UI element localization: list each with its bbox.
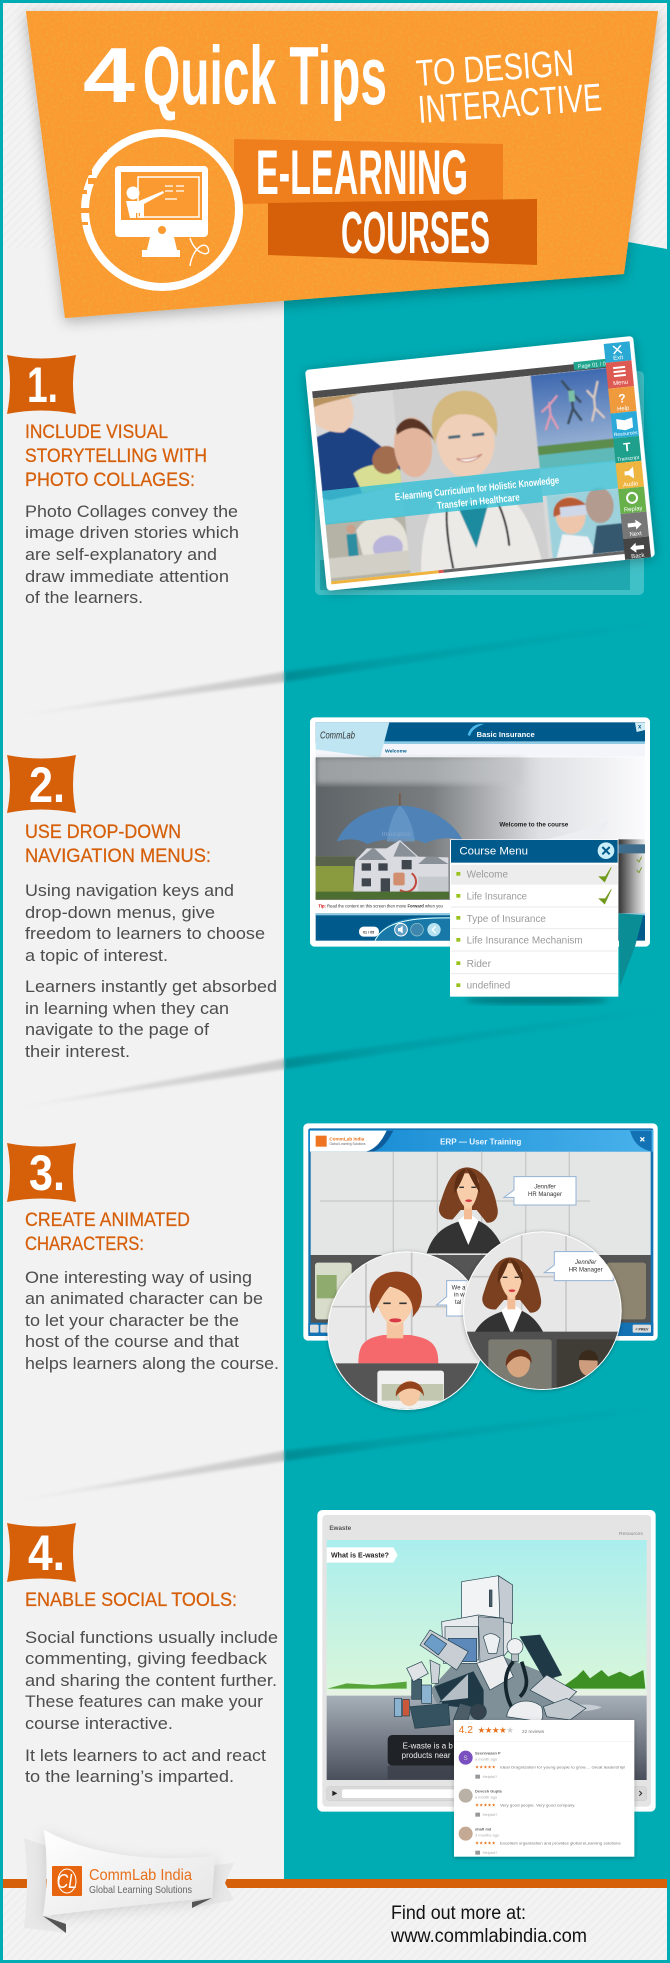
progress strip: [331, 570, 439, 584]
heading 1: STORYTELLING WITH: [25, 445, 207, 467]
screenshot: photo collage course: [305, 336, 655, 595]
section 1: [7, 355, 239, 607]
body text 2: navigate to the page of: [25, 1021, 209, 1039]
body text 3: helps learners along the course.: [25, 1355, 279, 1373]
orange footer bar: [3, 1879, 667, 1888]
logo mark: CL: [57, 1871, 77, 1893]
course window: x: [638, 725, 642, 731]
side toolbar: Transcript: [617, 455, 640, 463]
photo collage: [313, 368, 627, 588]
screenshot: e-waste course with reviews: [317, 1510, 656, 1857]
banner title: Transfer in Healthcare: [437, 492, 520, 512]
body text 1: of the learners.: [25, 589, 143, 607]
side toolbar: Menu: [613, 380, 628, 387]
course menu popup: Rider: [467, 959, 492, 970]
body text 2: a topic of interest.: [25, 947, 168, 965]
side toolbar: Help: [617, 406, 630, 413]
heading 2: USE DROP-DOWN: [25, 821, 181, 843]
side toolbar: Audio: [623, 481, 639, 489]
review three: [459, 1827, 621, 1855]
review two: a month ago: [475, 1795, 498, 1800]
caption box: [388, 1735, 468, 1779]
number badge 3: [7, 1143, 76, 1202]
review two: Helpful?: [483, 1812, 498, 1817]
body text 2: [25, 882, 277, 1061]
banner title: E-learning Curriculum for Holistic Knowledge: [395, 475, 560, 503]
find out more text: [390, 1903, 587, 1947]
storm scene with umbrella and house: [316, 757, 645, 900]
side toolbar: [604, 341, 651, 561]
course window: [317, 1510, 656, 1812]
heading 3: [25, 1209, 190, 1255]
number badge 4: [7, 1523, 76, 1582]
ribbon with logo: [24, 1830, 234, 1933]
body text 4: and sharing the content further.: [25, 1672, 277, 1690]
tilted course card: [305, 336, 655, 592]
course window: Welcome: [385, 748, 407, 754]
review two: ★★★★★: [475, 1803, 497, 1808]
footer background: [3, 1888, 667, 1960]
body text 2: drop-down menus, give: [25, 904, 215, 922]
storm scene with umbrella and house: Insurance: [382, 831, 411, 838]
teal right column: [284, 242, 667, 1907]
side toolbar: Back: [631, 553, 645, 560]
zoom circle: host character: in w: [454, 1293, 465, 1299]
logo tagline: Global Learning Solutions: [89, 1884, 192, 1896]
reviews card: 4.2: [459, 1725, 473, 1736]
scene sky and ground: [327, 1540, 647, 1780]
body text 3: to let your character be the: [25, 1312, 239, 1330]
heading 1: INCLUDE VISUAL: [25, 421, 168, 443]
review two: Very good people. Very good company.: [500, 1803, 575, 1808]
review one: Ideal Oragnization for young people to grow.... Great leadership!: [500, 1765, 625, 1770]
course menu popup: [450, 839, 618, 997]
review one: Helpful?: [483, 1774, 498, 1779]
course window: [303, 1123, 658, 1341]
reviews card: ★★★★★: [478, 1725, 513, 1735]
number badge 4: 4.: [28, 1525, 65, 1581]
body text 2: their interest.: [25, 1043, 130, 1061]
number badge 2: [7, 755, 76, 813]
character: Jennifer in window: [427, 1167, 505, 1253]
header banner: [26, 11, 658, 318]
review three: Helpful?: [483, 1850, 498, 1855]
zoom circle: Jennifer close-up: [460, 1230, 627, 1392]
course menu popup: Life Insurance: [467, 892, 527, 903]
title: 4 Quick Tips: [83, 29, 387, 122]
body text 3: host of the course and that: [25, 1333, 239, 1351]
caption box: products near: [402, 1751, 451, 1760]
side toolbar: Exit: [613, 355, 624, 362]
menu drop shadow: [465, 995, 608, 1005]
tilted course card: Page 01 / 05: [578, 361, 609, 370]
title tag: [327, 1547, 398, 1563]
body text 4: It lets learners to act and react: [25, 1747, 266, 1765]
review one: S: [464, 1756, 468, 1762]
heading 3: CREATE ANIMATED: [25, 1209, 190, 1231]
course window: [310, 717, 650, 947]
reviews card: 22 reviews: [522, 1729, 545, 1734]
body text 2: in learning when they can: [25, 1000, 229, 1018]
side toolbar: Resources: [614, 430, 638, 438]
courses ribbon: COURSES: [341, 200, 490, 266]
side toolbar: ?: [618, 391, 626, 406]
title tag: What is E-waste?: [331, 1553, 389, 1560]
zoom circle: Jennifer close-up: HR Manager: [569, 1267, 603, 1273]
body text 1: Photo Collages convey the: [25, 503, 238, 521]
speech bubble: Jennifer: HR Manager: [528, 1192, 562, 1198]
player controls: [327, 1787, 647, 1801]
player bar: 01 / 05: [363, 930, 374, 934]
body text 2: freedom to learners to choose: [25, 925, 265, 943]
heading 1: [25, 421, 207, 491]
banner shape: [26, 11, 658, 318]
body text 1: are self-explanatory and: [25, 546, 217, 564]
second menu and page fold: [618, 839, 645, 987]
speech bubble: Jennifer: [504, 1177, 576, 1205]
side toolbar: Next: [629, 531, 642, 538]
subtitle: to design interactive: [415, 42, 603, 132]
course window: ERP — User Training: [440, 1138, 521, 1147]
heading 2: [25, 821, 211, 867]
body text 4: Social functions usually include: [25, 1629, 278, 1647]
review three: shafi md: [475, 1827, 492, 1832]
course window: Global Learning Solutions: [329, 1142, 366, 1146]
course window: Resources: [619, 1531, 643, 1537]
side toolbar: Replay: [624, 506, 643, 514]
body text 4: [25, 1629, 278, 1786]
subtitle: to design interactive: INTERACTIVE: [417, 76, 603, 132]
review one: a month ago: [475, 1757, 498, 1762]
zoom circle: host character: [323, 1250, 490, 1417]
number badge 1: 1.: [27, 357, 58, 413]
section 2: [7, 755, 277, 1061]
number badge 2: 2.: [29, 757, 65, 813]
storm scene with umbrella and house: Welcome to the course: [499, 822, 569, 829]
body text 4: commenting, giving feedback: [25, 1650, 268, 1668]
heading 1: PHOTO COLLAGES:: [25, 469, 195, 491]
course window: CommLab: [320, 730, 355, 741]
body text 2: Using navigation keys and: [25, 882, 234, 900]
review three: ★★★★★: [475, 1841, 497, 1846]
zoom circle: host character: We a: [452, 1285, 466, 1291]
subtitle: to design interactive: TO DESIGN: [415, 42, 575, 94]
body text 1: image driven stories which: [25, 524, 239, 542]
review one: Seenivasan P: [475, 1751, 501, 1756]
tip line: [316, 900, 645, 913]
heading 2: NAVIGATION MENUS:: [25, 845, 211, 867]
body text 4: course interactive.: [25, 1715, 173, 1733]
body text 1: draw immediate attention: [25, 568, 229, 586]
course window: Basic Insurance: [477, 730, 535, 739]
course menu popup: Life Insurance Mechanism: [467, 936, 583, 947]
course menu popup: Course Menu: [459, 845, 528, 857]
body text 2: Learners instantly get absorbed: [25, 978, 277, 996]
section 4: [7, 1523, 278, 1786]
e-learning ribbon: [234, 138, 503, 208]
body text 1: [25, 503, 239, 607]
review one: [459, 1751, 625, 1779]
course window: Ewaste: [329, 1525, 352, 1532]
review two: [459, 1789, 575, 1817]
course window: CommLab India: [329, 1137, 365, 1142]
screenshot: basic insurance course with menu: [310, 717, 650, 1005]
zoom circle: host character: tal: [455, 1300, 461, 1306]
logo mark: [52, 1866, 82, 1896]
find out more text: www.commlabindia.com: [390, 1926, 587, 1947]
number badge 1: [7, 355, 76, 414]
course menu popup: Type of Insurance: [467, 914, 546, 925]
side toolbar: T: [623, 440, 632, 454]
heading 4: ENABLE SOCIAL TOOLS:: [25, 1589, 237, 1611]
body text 4: These features can make your: [25, 1693, 264, 1711]
body text 3: [25, 1269, 279, 1373]
tip line: Tip: Read the content on this screen then move Forward when you: [318, 904, 443, 909]
course window: < PREV: [635, 1327, 649, 1331]
banner title: [395, 475, 561, 516]
number badge 3: 3.: [29, 1145, 65, 1201]
reviews card: [454, 1720, 634, 1857]
player bar: [316, 913, 645, 941]
speech bubble: Jennifer: Jennifer: [533, 1185, 557, 1191]
caption box: E-waste is a b: [403, 1741, 453, 1750]
find out more text: Find out more at:: [391, 1903, 526, 1924]
heading 3: CHARACTERS:: [25, 1233, 144, 1255]
section 3: [7, 1143, 279, 1373]
body text 4: to the learning’s imparted.: [25, 1768, 234, 1786]
title: 4 Quick Tips: Quick Tips: [143, 29, 387, 122]
logo name: CommLab India: [89, 1867, 192, 1884]
ghost backing panel: [315, 371, 644, 595]
icon: teacher on monitor in ring: [80, 133, 239, 287]
course menu popup: Welcome: [467, 870, 508, 881]
screenshot: ERP user training with characters: [303, 1123, 658, 1417]
review three: 3 months ago: [475, 1833, 500, 1838]
top dark bar: [312, 361, 607, 398]
courses ribbon: [268, 199, 537, 266]
zoom circle: Jennifer close-up: Jennifer: [574, 1260, 597, 1266]
course menu popup: undefined: [467, 981, 510, 992]
body text 3: One interesting way of using: [25, 1269, 252, 1287]
title: 4 Quick Tips: 4: [83, 31, 135, 119]
body text 3: an animated character can be: [25, 1290, 263, 1308]
footer: [3, 1830, 667, 1960]
review one: ★★★★★: [475, 1765, 497, 1770]
e-learning ribbon: E-LEARNING: [256, 138, 468, 208]
e-waste pile: [394, 1576, 586, 1728]
review three: Excellent organization and provides global eLearning solutions: [500, 1841, 621, 1846]
review two: Devesh Gupta: [475, 1789, 503, 1794]
